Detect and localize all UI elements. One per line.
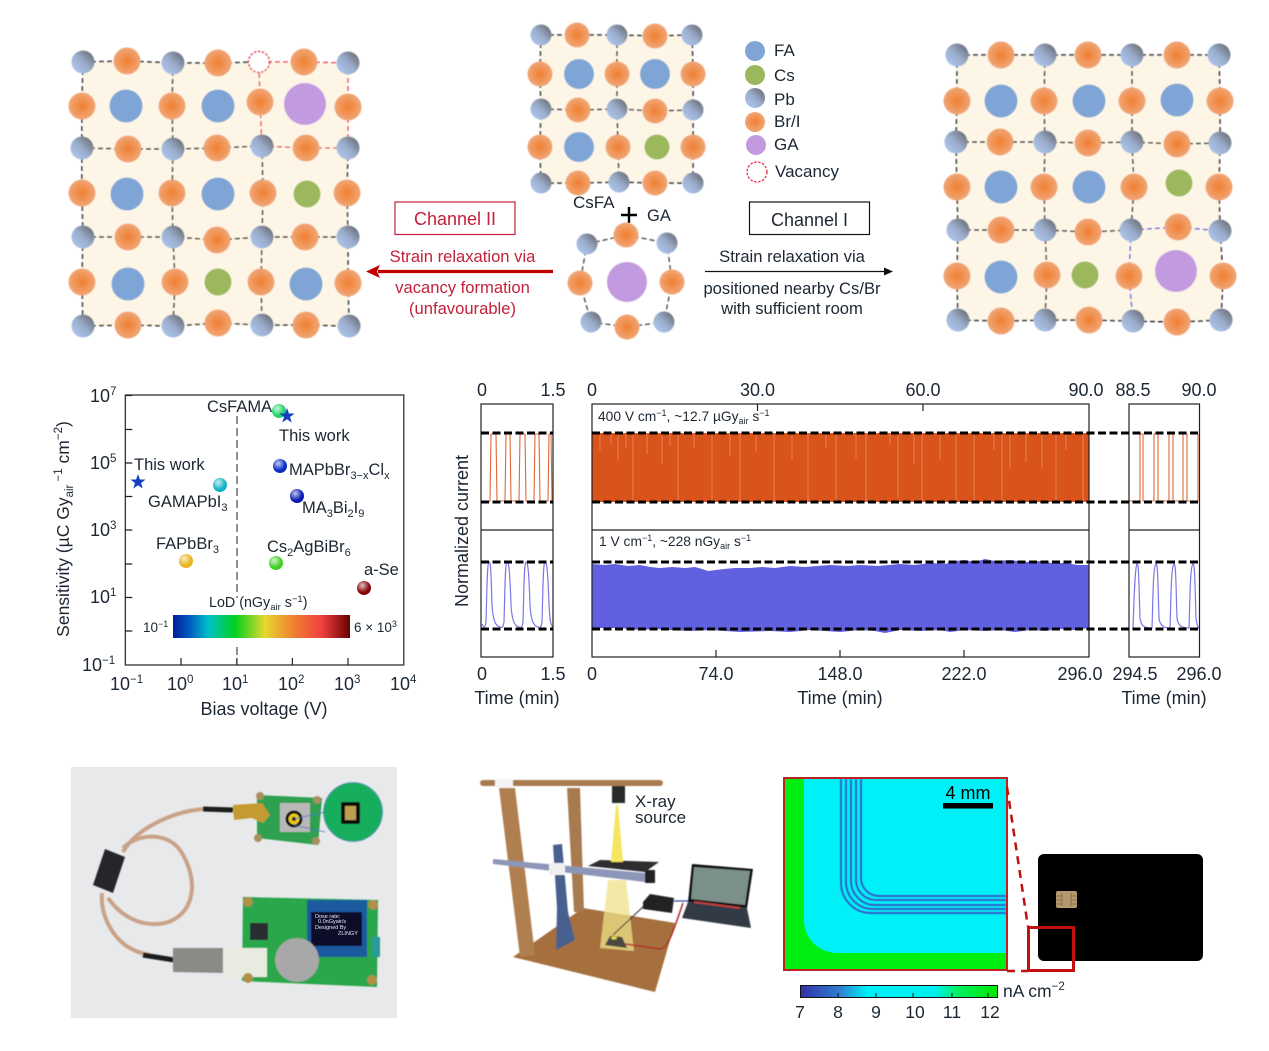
LoD colour bar: air bbox=[270, 602, 281, 613]
data labels: I bbox=[354, 499, 358, 517]
electronics box bbox=[643, 894, 674, 913]
short-window orange pulses, left bbox=[483, 434, 552, 501]
bottom axis labels: Time (min) bbox=[474, 688, 560, 708]
relaxed cell: blue dashes bbox=[1129, 227, 1220, 321]
smart card with zoom box bbox=[1007, 787, 1203, 971]
chip bbox=[1056, 891, 1077, 908]
top axis labels: 90.0 bbox=[1181, 380, 1217, 400]
y axis title: −2 bbox=[53, 427, 65, 440]
x axis tick labels: 0 bbox=[187, 674, 193, 686]
top axis labels: 30.0 bbox=[740, 380, 775, 400]
panel: lattice with GA near Cs (Channel I) bbox=[944, 42, 1236, 336]
channel II label and arrow: vacancy formation bbox=[395, 278, 530, 297]
OLED screen text bbox=[315, 914, 358, 937]
top beam bbox=[480, 780, 663, 786]
map colour bar: 10 bbox=[905, 1002, 925, 1022]
data labels bbox=[134, 398, 399, 579]
scale bar: 4 mm bbox=[946, 783, 990, 803]
X-ray source label: source bbox=[635, 808, 686, 827]
data labels: 6 bbox=[345, 547, 351, 559]
panel: GA ring bbox=[568, 222, 684, 340]
chart: normalized current stability: −1 bbox=[642, 533, 652, 543]
data labels: AgBiBr bbox=[293, 538, 345, 556]
data labels: Cs bbox=[267, 538, 287, 556]
x axis tick labels: 4 bbox=[410, 674, 417, 686]
map colour bar: 12 bbox=[980, 1002, 1000, 1022]
data labels: 3 bbox=[221, 502, 227, 514]
LoD colour bar: 10 bbox=[143, 620, 158, 635]
x axis tick labels: 10 bbox=[167, 674, 187, 694]
sensor board bbox=[257, 795, 322, 845]
orange full trace bbox=[592, 433, 1089, 502]
dashed envelope lines bbox=[481, 433, 1199, 629]
bottom axis labels: Time (min) bbox=[797, 688, 883, 708]
strained cell: red dashes bbox=[259, 62, 348, 148]
y axis tick labels: 10 bbox=[90, 587, 110, 607]
X-ray source label: X-ray bbox=[635, 792, 676, 811]
condition labels: , ~12.7 µGy bbox=[667, 409, 739, 424]
data labels: MA bbox=[302, 499, 327, 517]
data labels: x bbox=[384, 470, 390, 482]
x axis tick labels: 3 bbox=[354, 674, 360, 686]
x-ray source bbox=[612, 786, 625, 803]
data labels: 2 bbox=[348, 508, 354, 520]
data labels: This work bbox=[134, 456, 205, 474]
X-ray source label bbox=[635, 792, 686, 827]
legend bbox=[745, 41, 839, 182]
bottom axis labels: 0 bbox=[477, 664, 487, 684]
chart: normalized current stability: 1 V cm bbox=[599, 534, 642, 549]
LoD colour bar: −1 bbox=[158, 619, 168, 629]
top axis labels: 88.5 bbox=[1115, 380, 1151, 400]
short-window blue pulses, right bbox=[1133, 564, 1200, 629]
map colour bar: 11 bbox=[943, 1002, 961, 1022]
map colour bar: nA cm bbox=[1003, 981, 1052, 1001]
y axis tick labels: 10 bbox=[82, 655, 102, 675]
y axis tick labels: 10 bbox=[90, 386, 110, 406]
readout board bbox=[242, 897, 378, 987]
channel I label and arrow bbox=[703, 202, 893, 318]
y axis title: Normalized current bbox=[452, 455, 472, 607]
platform bbox=[588, 860, 659, 872]
map colour bar: 8 bbox=[833, 1002, 843, 1022]
x axis tick labels: 10 bbox=[278, 674, 298, 694]
x axis tick labels: 10 bbox=[222, 674, 242, 694]
chart: sensitivity vs bias voltage bbox=[53, 386, 417, 719]
channel I label and arrow: with sufficient room bbox=[720, 299, 863, 318]
x axis tick labels: 1 bbox=[242, 674, 248, 686]
horizontal beam bbox=[493, 859, 645, 882]
legend: Br/I bbox=[774, 112, 800, 131]
legend: Cs bbox=[774, 66, 795, 85]
OLED screen text: Dose rate: bbox=[315, 914, 341, 920]
blue column bbox=[553, 844, 575, 950]
short-window blue pulses, left bbox=[482, 562, 553, 627]
map colour bar: −2 bbox=[1052, 981, 1065, 993]
data labels: Cl bbox=[368, 461, 384, 479]
x axis tick labels: 10 bbox=[110, 674, 130, 694]
y axis title: Sensitivity (µC Gy bbox=[53, 497, 73, 637]
OLED screen text: ZLINGY bbox=[338, 931, 358, 937]
detector bbox=[605, 936, 627, 948]
LoD colour bar: LoD (nGy bbox=[209, 595, 270, 611]
y axis title: cm bbox=[53, 440, 73, 468]
chart: normalized current stability: −1 bbox=[741, 533, 751, 543]
bottom axis labels: 148.0 bbox=[817, 664, 863, 684]
label: CsFA + GA: CsFA bbox=[573, 193, 615, 212]
condition labels: s bbox=[749, 409, 759, 424]
base plate bbox=[513, 908, 675, 992]
channel II label and arrow: (unfavourable) bbox=[409, 299, 516, 318]
y axis title: ) bbox=[53, 421, 73, 427]
data labels: 3 bbox=[213, 544, 219, 556]
panel: CsFA lattice bbox=[528, 22, 706, 196]
condition labels: air bbox=[739, 416, 749, 426]
data labels: 3−x bbox=[350, 470, 369, 482]
top axis labels: 0 bbox=[587, 380, 597, 400]
LoD colour bar: ) bbox=[303, 595, 307, 611]
data labels: 3 bbox=[327, 508, 333, 520]
y axis tick labels: 1 bbox=[110, 587, 116, 599]
x-ray beam bbox=[611, 805, 623, 862]
data labels: GAMAPbI bbox=[148, 493, 221, 511]
blue full trace bbox=[592, 559, 1089, 633]
channel I label and arrow: positioned nearby Cs/Br bbox=[703, 279, 881, 298]
bottom axis labels: 294.5 bbox=[1112, 664, 1158, 684]
LoD colour bar: 6 × 10 bbox=[354, 620, 392, 635]
x axis tick labels bbox=[110, 674, 417, 694]
top axis labels: 1.5 bbox=[540, 380, 566, 400]
x axis tick labels: 10 bbox=[390, 674, 410, 694]
OLED screen text: 0.0nGyair/s bbox=[318, 919, 346, 925]
y axis title: −1 bbox=[53, 468, 65, 485]
label: CsFA + GA: GA bbox=[647, 207, 671, 225]
laptop bbox=[682, 902, 751, 928]
data labels: Bi bbox=[333, 499, 348, 517]
chart: normalized current stability: s bbox=[730, 534, 741, 549]
top axis labels bbox=[477, 380, 1217, 400]
map colour bar: 9 bbox=[871, 1002, 881, 1022]
map colour bar bbox=[795, 981, 1065, 1022]
label: CsFA + GA bbox=[573, 193, 671, 225]
top axis labels: 0 bbox=[477, 380, 487, 400]
data labels: This work bbox=[279, 427, 350, 445]
chart: normalized current stability: , ~228 nGy bbox=[652, 534, 720, 549]
y axis title: air bbox=[64, 484, 76, 497]
cables bbox=[102, 809, 203, 955]
front leg bbox=[499, 788, 535, 957]
data labels: a-Se bbox=[364, 561, 399, 579]
OLED screen text: Designed By bbox=[315, 925, 346, 931]
channel I label and arrow: Channel I bbox=[771, 210, 848, 230]
data labels: 2 bbox=[287, 547, 293, 559]
data labels: CsFAMA bbox=[207, 398, 272, 416]
bottom axis labels: Time (min) bbox=[1121, 688, 1207, 708]
frames bbox=[481, 404, 1200, 657]
y axis tick labels: −1 bbox=[102, 655, 115, 667]
y axis tick labels: 10 bbox=[90, 453, 110, 473]
y axis tick labels: 7 bbox=[110, 386, 116, 398]
map colour bar: 7 bbox=[795, 1002, 805, 1022]
LoD colour bar: −1 bbox=[292, 594, 303, 605]
channel I label and arrow: Strain relaxation via bbox=[719, 247, 866, 266]
bottom axis labels: 296.0 bbox=[1057, 664, 1103, 684]
legend: Vacancy bbox=[775, 162, 839, 181]
y axis tick labels: 3 bbox=[110, 520, 116, 532]
condition labels: 400 V cm bbox=[598, 409, 656, 424]
y axis tick labels: 10 bbox=[90, 520, 110, 540]
short-window orange pulses, right bbox=[1129, 434, 1198, 501]
channel II label and arrow: Strain relaxation via bbox=[390, 247, 536, 266]
x axis tick labels: 2 bbox=[298, 674, 304, 686]
legend: Pb bbox=[774, 90, 795, 109]
data labels: MAPbBr bbox=[289, 461, 350, 479]
condition labels: −1 bbox=[759, 408, 770, 418]
contour lines bbox=[841, 779, 1006, 913]
LoD colour bar: s bbox=[281, 595, 292, 611]
panel: lattice with GA and vacancy (Channel II) bbox=[68, 48, 362, 338]
top axis labels: 60.0 bbox=[905, 380, 941, 400]
photo: portable dosimeter bbox=[71, 767, 397, 1018]
x axis title: Bias voltage (V) bbox=[200, 699, 328, 719]
LoD colour bar bbox=[143, 594, 397, 638]
x axis tick labels: −1 bbox=[130, 674, 143, 686]
y axis tick labels: 5 bbox=[110, 453, 116, 465]
bottom axis labels: 74.0 bbox=[698, 664, 734, 684]
LoD colour bar: 3 bbox=[392, 619, 397, 629]
channel II label and arrow: Channel II bbox=[414, 209, 496, 229]
data points bbox=[130, 404, 371, 595]
chart: normalized current stability: air bbox=[720, 541, 730, 551]
panel: current map bbox=[784, 778, 1007, 970]
x axis tick labels: 10 bbox=[334, 674, 354, 694]
top axis labels: 90.0 bbox=[1068, 380, 1104, 400]
bottom axis labels: 0 bbox=[587, 664, 597, 684]
data labels: FAPbBr bbox=[156, 535, 213, 553]
bottom axis labels: 222.0 bbox=[941, 664, 987, 684]
condition labels: −1 bbox=[656, 408, 667, 418]
y axis tick labels bbox=[82, 386, 116, 675]
chart: normalized current stability bbox=[452, 380, 1222, 708]
bottom axis labels: 296.0 bbox=[1176, 664, 1222, 684]
data labels: 9 bbox=[358, 508, 364, 520]
bottom axis labels bbox=[474, 664, 1222, 708]
legend: FA bbox=[774, 41, 795, 60]
rear leg bbox=[567, 788, 584, 912]
bottom axis labels: 1.5 bbox=[540, 664, 566, 684]
legend: GA bbox=[774, 135, 799, 154]
channel II label and arrow bbox=[366, 202, 553, 318]
illustration: X-ray imaging setup bbox=[480, 779, 753, 992]
